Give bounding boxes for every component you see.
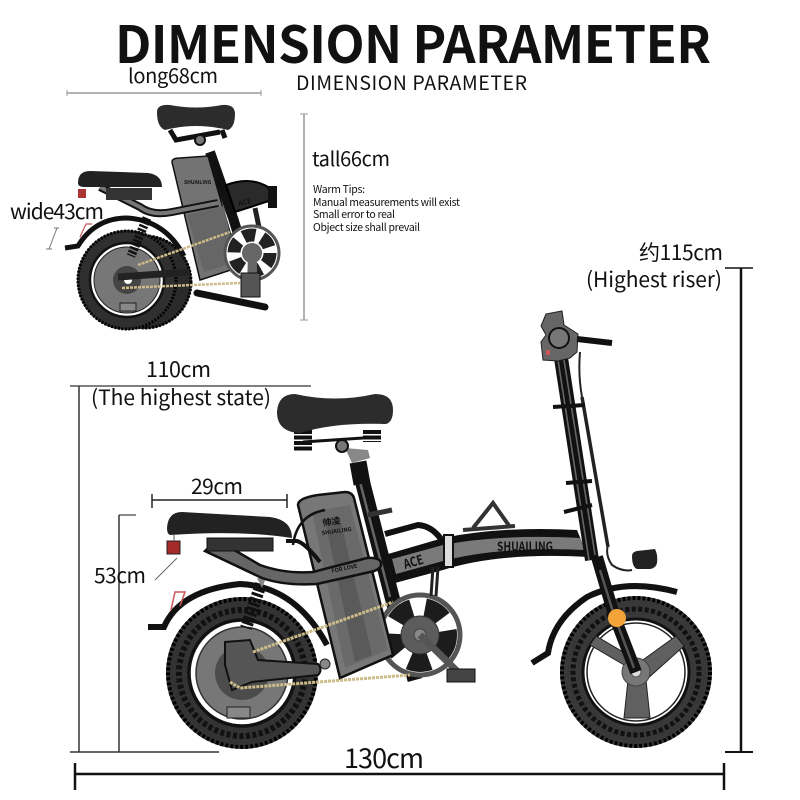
upper frame tube <box>385 525 443 542</box>
full bike illustration <box>148 311 712 749</box>
folded bike: rear fender <box>65 218 184 256</box>
rear seat <box>167 512 292 538</box>
dimension: 29cm seat length <box>152 471 287 508</box>
crank arm <box>420 635 458 672</box>
headlight <box>632 549 657 569</box>
main frame beam: ACE <box>400 549 425 573</box>
orange reflector <box>608 609 626 627</box>
dimension: 110cm highest state: 110cm <box>146 353 211 384</box>
battery cable <box>293 510 325 545</box>
swing arm pivot <box>320 659 330 669</box>
battery: 帅凌 <box>322 514 341 529</box>
rear reflector <box>171 592 185 610</box>
battery <box>298 492 393 678</box>
rear rack tube: FOR LOVE <box>331 562 359 575</box>
pedal <box>447 669 475 682</box>
seat tube and lower frame <box>362 480 415 680</box>
dimension: 115cm highest riser: (Highest riser) <box>586 264 722 294</box>
folded bike: battery: SHUAILING <box>184 179 212 186</box>
folded bike: rear seat <box>78 171 162 187</box>
dimension: 110cm highest state <box>70 353 311 752</box>
dimension: 115cm highest riser: 约115cm <box>639 237 723 267</box>
chain <box>230 602 410 688</box>
tail light <box>167 535 180 554</box>
folded bike: second rear tire behind <box>98 235 192 329</box>
rear rack loop <box>286 541 320 562</box>
seat clamp lever <box>368 510 392 515</box>
folded bike: chain <box>122 232 240 288</box>
folded bike: battery <box>172 156 240 280</box>
folded bike: pedal <box>241 273 260 297</box>
dimension: 130cm overall length: 130cm <box>344 737 424 776</box>
warm tips note <box>313 182 460 235</box>
main frame beam <box>388 529 588 583</box>
steering stem <box>561 358 592 560</box>
chainring <box>380 595 460 675</box>
folded bike: rear rack tube <box>100 187 218 213</box>
folded bike: folded main frame: ACE <box>237 196 253 209</box>
folded bike: shock absorber <box>131 218 147 256</box>
folded bike illustration <box>65 105 279 330</box>
folded bike: seat post and frame tube <box>210 152 250 272</box>
saddle springs <box>303 430 378 452</box>
handlebar head <box>541 311 578 361</box>
front fork <box>597 557 636 672</box>
rear shock absorber <box>246 578 266 628</box>
folded bike: tail light <box>78 189 86 198</box>
seat post bellows <box>358 462 362 484</box>
seat clamp <box>345 448 370 463</box>
battery: SHUAILING <box>321 525 352 537</box>
front wheel <box>560 596 712 748</box>
motor bracket and swing arm <box>225 640 320 690</box>
front fender <box>532 586 677 663</box>
rear wheel <box>166 597 318 749</box>
rear rack tube <box>205 540 381 584</box>
folded bike: rear wheel <box>77 230 177 330</box>
warm tips note: Small error to real <box>313 207 395 222</box>
carry handle <box>463 503 515 530</box>
warm tips note: Object size shall prevail <box>313 220 420 235</box>
dimension: folded width <box>10 196 104 249</box>
dimension: folded height: tall66cm <box>312 143 390 172</box>
outer stem tube <box>582 397 608 547</box>
dimension: folded width: wide43cm <box>10 196 104 226</box>
folded bike: chainring <box>225 226 279 285</box>
dimension: 110cm highest state: (The highest state) <box>91 382 271 412</box>
main frame beam: SHUAILING <box>497 536 553 555</box>
folded bike: seat clamp <box>195 135 205 145</box>
folded bike: reflector <box>80 224 92 237</box>
warm tips note: Manual measurements will exist <box>313 195 460 210</box>
title: DIMENSION PARAMETER <box>115 4 711 78</box>
handlebar grip <box>577 339 612 343</box>
folded bike: bag under seat <box>106 188 152 200</box>
folding hinge <box>444 535 453 567</box>
warm tips note: Warm Tips: <box>313 182 365 197</box>
tail wire <box>155 558 177 580</box>
bag under rear seat <box>207 538 273 551</box>
brake cable <box>579 352 632 570</box>
rear fender <box>148 584 327 645</box>
folded bike: folded main frame <box>226 181 277 232</box>
folded bike: saddle springs <box>170 130 225 140</box>
subtitle: DIMENSION PARAMETER <box>296 67 527 96</box>
dimension: 115cm highest riser <box>586 237 753 752</box>
folded bike: saddle <box>157 105 235 130</box>
dimension: 29cm seat length: 29cm <box>191 471 243 501</box>
folded bike: handlebar folded <box>197 293 265 307</box>
dimension: 53cm seat height: 53cm <box>94 560 146 590</box>
stem clamps <box>553 405 592 512</box>
saddle <box>277 394 393 433</box>
frame down tubes to pedal <box>431 567 438 596</box>
dimension: folded length: long68cm <box>128 60 218 89</box>
folded bike: swing arm <box>118 272 190 277</box>
